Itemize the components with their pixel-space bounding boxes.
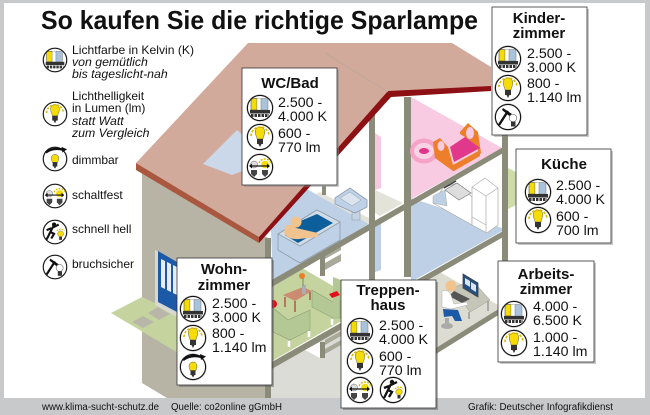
- house illustration: [111, 43, 516, 398]
- legend item: Lichthelligkeit: in Lumen (lm): [72, 101, 145, 115]
- panel: Arbeitszimmer: 1.140 lm: [533, 344, 587, 360]
- hallway blue wall: [375, 222, 381, 272]
- front door: [155, 250, 177, 317]
- panel: Küche: 600 -: [556, 209, 589, 225]
- panel: WC/Bad: 770 lm: [278, 140, 321, 156]
- panel: Wohnzimmer: zimmer: [198, 277, 250, 294]
- panel: Treppenhaus: [341, 280, 438, 410]
- legend item: dimmbar: dimmbar: [72, 153, 119, 167]
- office desk and person: [441, 274, 490, 329]
- hallway pink wall: [375, 133, 381, 190]
- living room furniture: [269, 273, 341, 347]
- panel: Küche: [516, 149, 613, 245]
- legend item: Lichtfarbe: Lichtfarbe in Kelvin (K): [72, 43, 194, 57]
- panel: Kinderzimmer: Kinder-: [513, 10, 565, 27]
- title: So kaufen Sie die richtige Sparlampe: [41, 7, 478, 35]
- panel: Küche: 700 lm: [556, 223, 599, 239]
- panel: Wohnzimmer: 800 -: [212, 326, 245, 342]
- foundation: [271, 325, 345, 398]
- legend item: schnell hell: schnell hell: [72, 222, 131, 236]
- panel: Wohnzimmer: 2.500 -: [212, 296, 256, 312]
- living room floor: [272, 268, 345, 361]
- legend item: bruchsicher: bruchsicher: [72, 257, 134, 271]
- footer band: [0, 398, 650, 415]
- panel: Treppenhaus: 4.000 K: [379, 332, 428, 348]
- legend item: Lichthelligkeit: Lichthelligkeit: [72, 89, 145, 103]
- panel: Küche: Küche: [541, 156, 587, 173]
- legend item: schaltfest: [42, 183, 123, 209]
- panel: Treppenhaus: 2.500 -: [379, 318, 423, 334]
- panel: WC/Bad: 600 -: [278, 126, 311, 142]
- bathroom floor: [271, 188, 369, 281]
- kitchen floor: [411, 198, 502, 282]
- legend item: Lichthelligkeit: zum Vergleich: [71, 126, 150, 140]
- legend item: Lichtfarbe: [42, 43, 194, 81]
- roof: [136, 43, 491, 243]
- kitchen units: [433, 178, 498, 233]
- panel: Arbeitszimmer: 1.000 -: [533, 330, 577, 346]
- panel: Kinderzimmer: zimmer: [513, 25, 565, 42]
- legend item: bruchsicher: [42, 254, 134, 280]
- panel: Küche: 4.000 K: [556, 192, 605, 208]
- panel: Kinderzimmer: 800 -: [527, 76, 560, 92]
- children's room floor: [411, 97, 502, 199]
- panel: WC/Bad: 2.500 -: [278, 95, 322, 111]
- legend item: schnell hell: [42, 219, 131, 245]
- washbasin: [335, 188, 367, 220]
- panel: Kinderzimmer: [492, 7, 589, 137]
- panel: Wohnzimmer: Wohn-: [201, 261, 247, 278]
- legend item: Lichtfarbe: von gemütlich: [72, 55, 148, 69]
- hallway floor: [375, 190, 403, 216]
- legend item: Lichthelligkeit: [42, 89, 150, 140]
- floor beams and posts: [265, 97, 508, 398]
- panel: Arbeitszimmer: zimmer: [520, 281, 572, 298]
- legend item: Lichtfarbe: bis tageslicht-nah: [72, 67, 168, 81]
- panel: Treppenhaus: Treppen-: [356, 282, 420, 299]
- footer: credit: Grafik: Deutscher Infografikdienst: [468, 402, 613, 413]
- garden lawn and paving: [111, 168, 516, 354]
- stairs: [320, 243, 341, 354]
- panel: Arbeitszimmer: Arbeits-: [518, 266, 574, 283]
- panel: Wohnzimmer: [177, 258, 274, 387]
- panel: Treppenhaus: haus: [370, 297, 406, 314]
- panel: Treppenhaus: 770 lm: [379, 363, 422, 379]
- panel: WC/Bad: 4.000 K: [278, 109, 327, 125]
- bath tub with person: [278, 210, 340, 263]
- panel: Treppenhaus: 600 -: [379, 349, 412, 365]
- legend item: schaltfest: schaltfest: [72, 188, 123, 202]
- roof skylight: [203, 130, 245, 175]
- outer wall: [142, 170, 268, 398]
- panel: Arbeitszimmer: 6.500 K: [533, 313, 582, 329]
- rug: [410, 138, 438, 164]
- legend item: Lichthelligkeit: statt Watt: [72, 114, 124, 128]
- panel: Wohnzimmer: 1.140 lm: [212, 340, 266, 356]
- panel: Kinderzimmer: 1.140 lm: [527, 90, 581, 106]
- panel: WC/Bad: [242, 68, 339, 187]
- office floor: [417, 271, 498, 349]
- footer: website: www.klima-sucht-schutz.de: [41, 402, 160, 413]
- panel: Kinderzimmer: 3.000 K: [527, 60, 576, 76]
- footer: source: Quelle: co2online gGmbH: [171, 402, 282, 413]
- panel: WC/Bad: WC/Bad: [261, 75, 319, 92]
- bed: [433, 123, 481, 171]
- legend: [42, 43, 194, 280]
- panel: Kinderzimmer: 2.500 -: [527, 46, 571, 62]
- panel: Arbeitszimmer: 4.000 -: [533, 299, 577, 315]
- legend item: dimmbar: [42, 146, 119, 172]
- panel: Arbeitszimmer: [498, 261, 596, 364]
- panel: Küche: 2.500 -: [556, 178, 600, 194]
- panel: Wohnzimmer: 3.000 K: [212, 310, 261, 326]
